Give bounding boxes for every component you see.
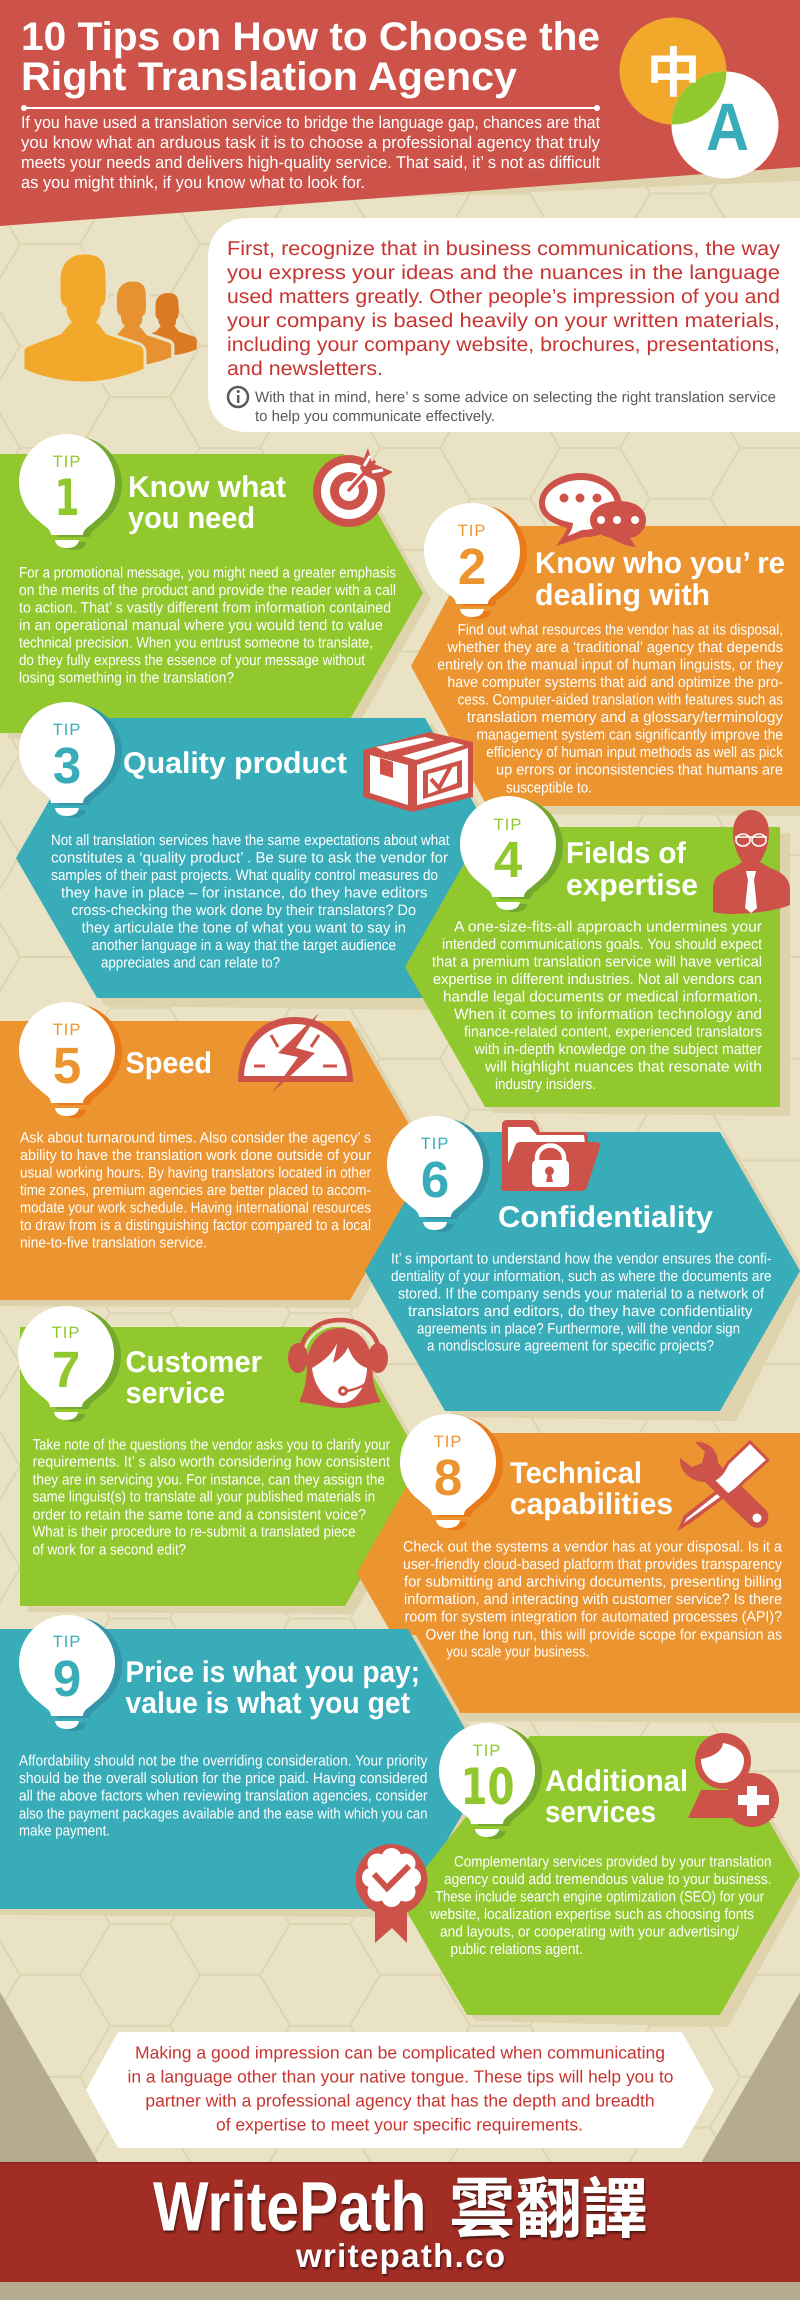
- heading: Speed: [126, 1047, 212, 1080]
- body text: [51, 832, 450, 971]
- heading: [126, 1346, 262, 1410]
- heading: Know what: [128, 471, 286, 504]
- intro text: If you have used a translation service to bridge the language gap, chances are that: [21, 113, 600, 132]
- bulb: tip 5: [19, 1002, 122, 1118]
- body text: a nondisclosure agreement for specific projects?: [427, 1338, 714, 1355]
- body text: all the above factors when reviewing translation agencies, consider: [19, 1788, 428, 1805]
- body text: to draw from is a distinguishing factor compared to a local: [20, 1217, 371, 1234]
- body text: handle legal documents or medical information.: [443, 989, 762, 1006]
- body text: Complementary services provided by your translation: [454, 1854, 772, 1871]
- body text: they are in servicing you. For instance, can they assign the: [33, 1471, 385, 1488]
- body text: [437, 621, 783, 796]
- body text: Take note of the questions the vendor asks you to clarify your: [33, 1436, 390, 1453]
- panel: tip 4: [405, 796, 790, 1116]
- body text: room for system integration for automated processes (API)?: [405, 1609, 782, 1626]
- bulb: tip 6: TIP: [421, 1135, 449, 1153]
- advice text: With that in mind, here’ s some advice on selecting the right translation service: [255, 389, 776, 406]
- heading: dealing with: [535, 579, 710, 612]
- closing text: partner with a professional agency that has the depth and breadth: [145, 2091, 655, 2111]
- body text: industry insiders.: [495, 1076, 596, 1093]
- body text: Check out the systems a vendor has at your disposal. Is it a: [403, 1539, 783, 1556]
- heading: Price is what you pay;: [126, 1656, 420, 1689]
- bulb: tip 4: [460, 796, 563, 912]
- body text: Not all translation services have the same expectations about what: [51, 832, 450, 849]
- icon: wrench and screwdriver: [680, 1442, 768, 1528]
- body text: whether they are a ‘traditional’ agency that depends: [446, 639, 783, 656]
- body text: make payment.: [19, 1823, 110, 1840]
- body text: on the merits of the product and provide the reader with a call: [19, 582, 396, 599]
- bulb: tip 7: [18, 1306, 121, 1422]
- body text: [391, 1250, 772, 1355]
- body text: [429, 1854, 772, 1958]
- icon: locked folder: [501, 1120, 600, 1191]
- body text: intended communications goals. You should expect: [442, 936, 763, 953]
- body text: will highlight nuances that resonate with: [484, 1058, 762, 1075]
- intro text: you know what an arduous task it is to choose a professional agency that truly: [21, 133, 600, 152]
- body text: to action. That’ s vastly different from information contained: [19, 599, 391, 616]
- body text: Over the long run, this will provide scope for expansion as: [426, 1626, 782, 1643]
- icon: language circles: 中: [646, 29, 700, 108]
- body text: in an operational manual where you would tend to value: [19, 617, 383, 634]
- brand text: [153, 2156, 648, 2274]
- closing text: Making a good impression can be complicated when communicating: [135, 2042, 665, 2062]
- lead text: you express your ideas and the nuances in the language: [227, 262, 780, 284]
- body text: finance-related content, experienced translators: [464, 1024, 762, 1041]
- body text: time zones, premium agencies are better placed to accom-: [20, 1182, 371, 1199]
- bulb: tip 2: 2: [458, 538, 486, 595]
- bulb: tip 9: [19, 1615, 122, 1731]
- heading: Fields of: [566, 837, 687, 870]
- body text: stored. If the company sends your material to a network of: [398, 1286, 765, 1303]
- body text: [19, 564, 396, 686]
- body text: susceptible to.: [506, 779, 592, 796]
- body text: Affordability should not be the overriding consideration. Your priority: [19, 1753, 428, 1770]
- panel: tip 6: [365, 1116, 800, 1421]
- body text: For a promotional message, you might need a greater emphasis: [19, 564, 396, 581]
- body text: you scale your business.: [446, 1644, 589, 1661]
- body text: [403, 1539, 783, 1661]
- lead text: and newsletters.: [227, 358, 383, 380]
- body text: of work for a second edit?: [33, 1541, 186, 1558]
- heading: Quality product: [123, 747, 347, 780]
- icon: target: [313, 448, 393, 527]
- icon: customer service agent: [288, 1320, 388, 1408]
- bulb: tip 3: 3: [53, 737, 81, 794]
- intro text: [21, 113, 600, 192]
- heading: [128, 471, 286, 535]
- intro text: meets your needs and delivers high-quality service. That said, it’ s not as difficult: [21, 153, 600, 172]
- panel: tip 2: [411, 473, 800, 816]
- icon: language circles: [620, 18, 778, 178]
- heading: [545, 1765, 688, 1829]
- bulb: tip 3: [19, 702, 122, 818]
- brand text: 雲翻譯: [449, 2156, 648, 2252]
- body text: management system can significantly improve the: [476, 727, 783, 744]
- bulb: tip 7: TIP: [52, 1324, 80, 1342]
- heading: [566, 837, 698, 902]
- panel: tip 9: [0, 1615, 496, 1917]
- closing text: of expertise to meet your specific requirements.: [216, 2115, 583, 2135]
- icon: person with plus: [688, 1733, 779, 1827]
- body text: order to retain the same tone and a consistent voice?: [33, 1506, 366, 1523]
- closing callout: [86, 2032, 714, 2148]
- body text: dentiality of your information, such as where the documents are: [391, 1268, 772, 1285]
- bulb: tip 8: [400, 1414, 503, 1530]
- body text: do they fully express the essence of your message without: [19, 652, 366, 669]
- bulb: tip 10: TIP: [473, 1742, 501, 1760]
- bulb: tip 5: 5: [53, 1037, 81, 1094]
- bulb: tip 8: TIP: [434, 1433, 462, 1451]
- body text: technical precision. When you entrust someone to translate,: [19, 634, 373, 651]
- panel: tip 1: [0, 434, 431, 739]
- bulb: tip 6: [387, 1116, 490, 1232]
- lead text: [227, 238, 780, 380]
- body text: have computer systems that aid and optimize the pro-: [447, 674, 783, 691]
- body text: ability to have the translation work done outside of your: [20, 1147, 371, 1164]
- body text: cross-checking the work done by their translators? Do: [71, 902, 416, 919]
- title: [21, 15, 600, 99]
- bulb: tip 9: 9: [53, 1650, 81, 1707]
- brand text: WritePath: [153, 2168, 426, 2246]
- heading: [510, 1457, 673, 1521]
- icon: info: [228, 387, 248, 407]
- heading: [535, 547, 785, 612]
- body text: should be the overall solution for the price paid. Having considered: [19, 1770, 428, 1787]
- bulb: tip 8: 8: [434, 1449, 462, 1506]
- body text: expertise in different industries. Not all vendors can: [433, 971, 762, 988]
- brand text: writepath.co: [295, 2237, 505, 2274]
- divider: [21, 105, 600, 111]
- panel: first recognize: [208, 218, 800, 432]
- body text: and layouts, or cooperating with your advertising/: [440, 1923, 740, 1940]
- body text: losing something in the translation?: [19, 669, 234, 686]
- body text: translators and editors, do they have confidentiality: [408, 1303, 753, 1320]
- advice text: to help you communicate effectively.: [255, 408, 495, 425]
- heading: Confidentiality: [498, 1201, 713, 1234]
- lead text: used matters greatly. Other people’s impression of you and: [227, 286, 780, 308]
- icon: people: [23, 253, 197, 383]
- body text: usual working hours. By having translators located in other: [20, 1164, 371, 1181]
- closing text: in a language other than your native tongue. These tips will help you to: [128, 2066, 674, 2086]
- heading: services: [545, 1796, 656, 1829]
- panel: tip 5: [0, 1002, 438, 1308]
- footer: brand: [0, 2156, 800, 2282]
- body text: that a premium translation service will have vertical: [432, 954, 762, 971]
- title: 10 Tips on How to Choose the: [21, 15, 600, 59]
- bulb: tip 2: [424, 503, 527, 619]
- body text: same linguist(s) to translate all your published materials in: [33, 1489, 375, 1506]
- bulb: tip 6: 6: [421, 1151, 449, 1208]
- body text: [33, 1436, 391, 1558]
- body text: agency could add tremendous value to your business.: [444, 1871, 772, 1888]
- heading: [126, 1656, 420, 1720]
- body text: requirements. It’ s also worth considering how consistent: [33, 1454, 391, 1471]
- icon: box: [363, 732, 473, 812]
- bulb: tip 4: 4: [494, 831, 523, 888]
- panel: tip 10: [356, 1723, 800, 2027]
- body text: samples of their past projects. What quality control measures do: [51, 867, 438, 884]
- heading: Additional: [545, 1765, 688, 1798]
- icon: language circles: A: [706, 90, 749, 165]
- heading: service: [126, 1377, 225, 1410]
- bulb: tip 3: TIP: [53, 721, 81, 739]
- body text: A one-size-fits-all approach undermines your: [454, 919, 762, 936]
- heading: value is what you get: [126, 1687, 410, 1720]
- body text: modate your work schedule. Having international resources: [20, 1200, 371, 1217]
- heading: expertise: [566, 869, 698, 902]
- body text: appreciates and can relate to?: [101, 954, 280, 971]
- bulb: tip 4: TIP: [494, 816, 522, 834]
- header banner: [0, 0, 800, 226]
- title: Right Translation Agency: [21, 55, 518, 99]
- body text: information, and interacting with customer service? Is there: [404, 1591, 782, 1608]
- heading: capabilities: [510, 1488, 673, 1521]
- icon: approval ribbon badge: [356, 1844, 428, 1943]
- body text: It’ s important to understand how the vendor ensures the confi-: [391, 1250, 772, 1267]
- body text: nine-to-five translation service.: [20, 1234, 207, 1251]
- body text: [20, 1129, 371, 1251]
- panel: tip 3: [16, 702, 513, 1010]
- panel: tip 8: [357, 1414, 800, 1723]
- body text: user-friendly cloud-based platform that provides transparency: [403, 1556, 782, 1573]
- body text: they have in place – for instance, do they have editors: [61, 884, 428, 901]
- icon: speed gauge: [238, 1013, 353, 1093]
- heading: Technical: [510, 1457, 642, 1490]
- advice text: [255, 389, 776, 425]
- body text: with in-depth knowledge on the subject matter: [474, 1041, 762, 1058]
- heading: Customer: [126, 1346, 262, 1379]
- body text: they articulate the tone of what you want to say in: [82, 920, 406, 937]
- body text: agreements in place? Furthermore, will the vendor sign: [417, 1320, 740, 1337]
- body text: [19, 1753, 428, 1840]
- body text: for submitting and archiving documents, presenting billing: [404, 1574, 782, 1591]
- icon: businessman: [713, 810, 790, 914]
- heading: Know who you’ re: [535, 547, 785, 580]
- bulb: tip 10: [439, 1723, 542, 1839]
- bulb: tip 2: TIP: [458, 522, 486, 540]
- body text: public relations agent.: [450, 1941, 583, 1958]
- bulb: tip 1: [19, 434, 122, 550]
- bulb: tip 1: 1: [54, 469, 80, 527]
- bulb: tip 9: TIP: [53, 1633, 81, 1651]
- closing text: [128, 2042, 674, 2135]
- body text: [432, 919, 763, 1093]
- lead text: including your company website, brochures, presentations,: [227, 334, 780, 356]
- body text: up errors or inconsistencies that humans are: [496, 762, 783, 779]
- body text: What is their procedure to re-submit a translated piece: [33, 1524, 356, 1541]
- body text: another language in a way that the target audience: [92, 937, 396, 954]
- body text: constitutes a ‘quality product’ . Be sure to ask the vendor for: [51, 850, 448, 867]
- body text: Ask about turnaround times. Also consider the agency’ s: [20, 1129, 371, 1146]
- bottom side wedges: [0, 1992, 800, 2300]
- lead text: your company is based heavily on your written materials,: [227, 310, 780, 332]
- panel: tip 7: [18, 1306, 433, 1614]
- bulb: tip 1: TIP: [53, 453, 81, 471]
- intro text: as you might think, if you know what to look for.: [21, 173, 365, 192]
- body text: also the payment packages available and the ease with which you can: [19, 1805, 428, 1822]
- bulb: tip 10: 10: [460, 1758, 514, 1816]
- body text: translation memory and a glossary/terminology: [467, 709, 783, 726]
- icon: speech bubbles: [539, 473, 646, 547]
- bulb: tip 5: TIP: [53, 1021, 81, 1039]
- body text: entirely on the manual input of human linguists, or they: [437, 657, 783, 674]
- lead text: First, recognize that in business communications, the way: [227, 238, 780, 260]
- body text: website, localization expertise such as choosing fonts: [429, 1906, 754, 1923]
- body text: When it comes to information technology and: [454, 1006, 762, 1023]
- heading: you need: [128, 502, 255, 535]
- bulb: tip 7: 7: [52, 1341, 80, 1398]
